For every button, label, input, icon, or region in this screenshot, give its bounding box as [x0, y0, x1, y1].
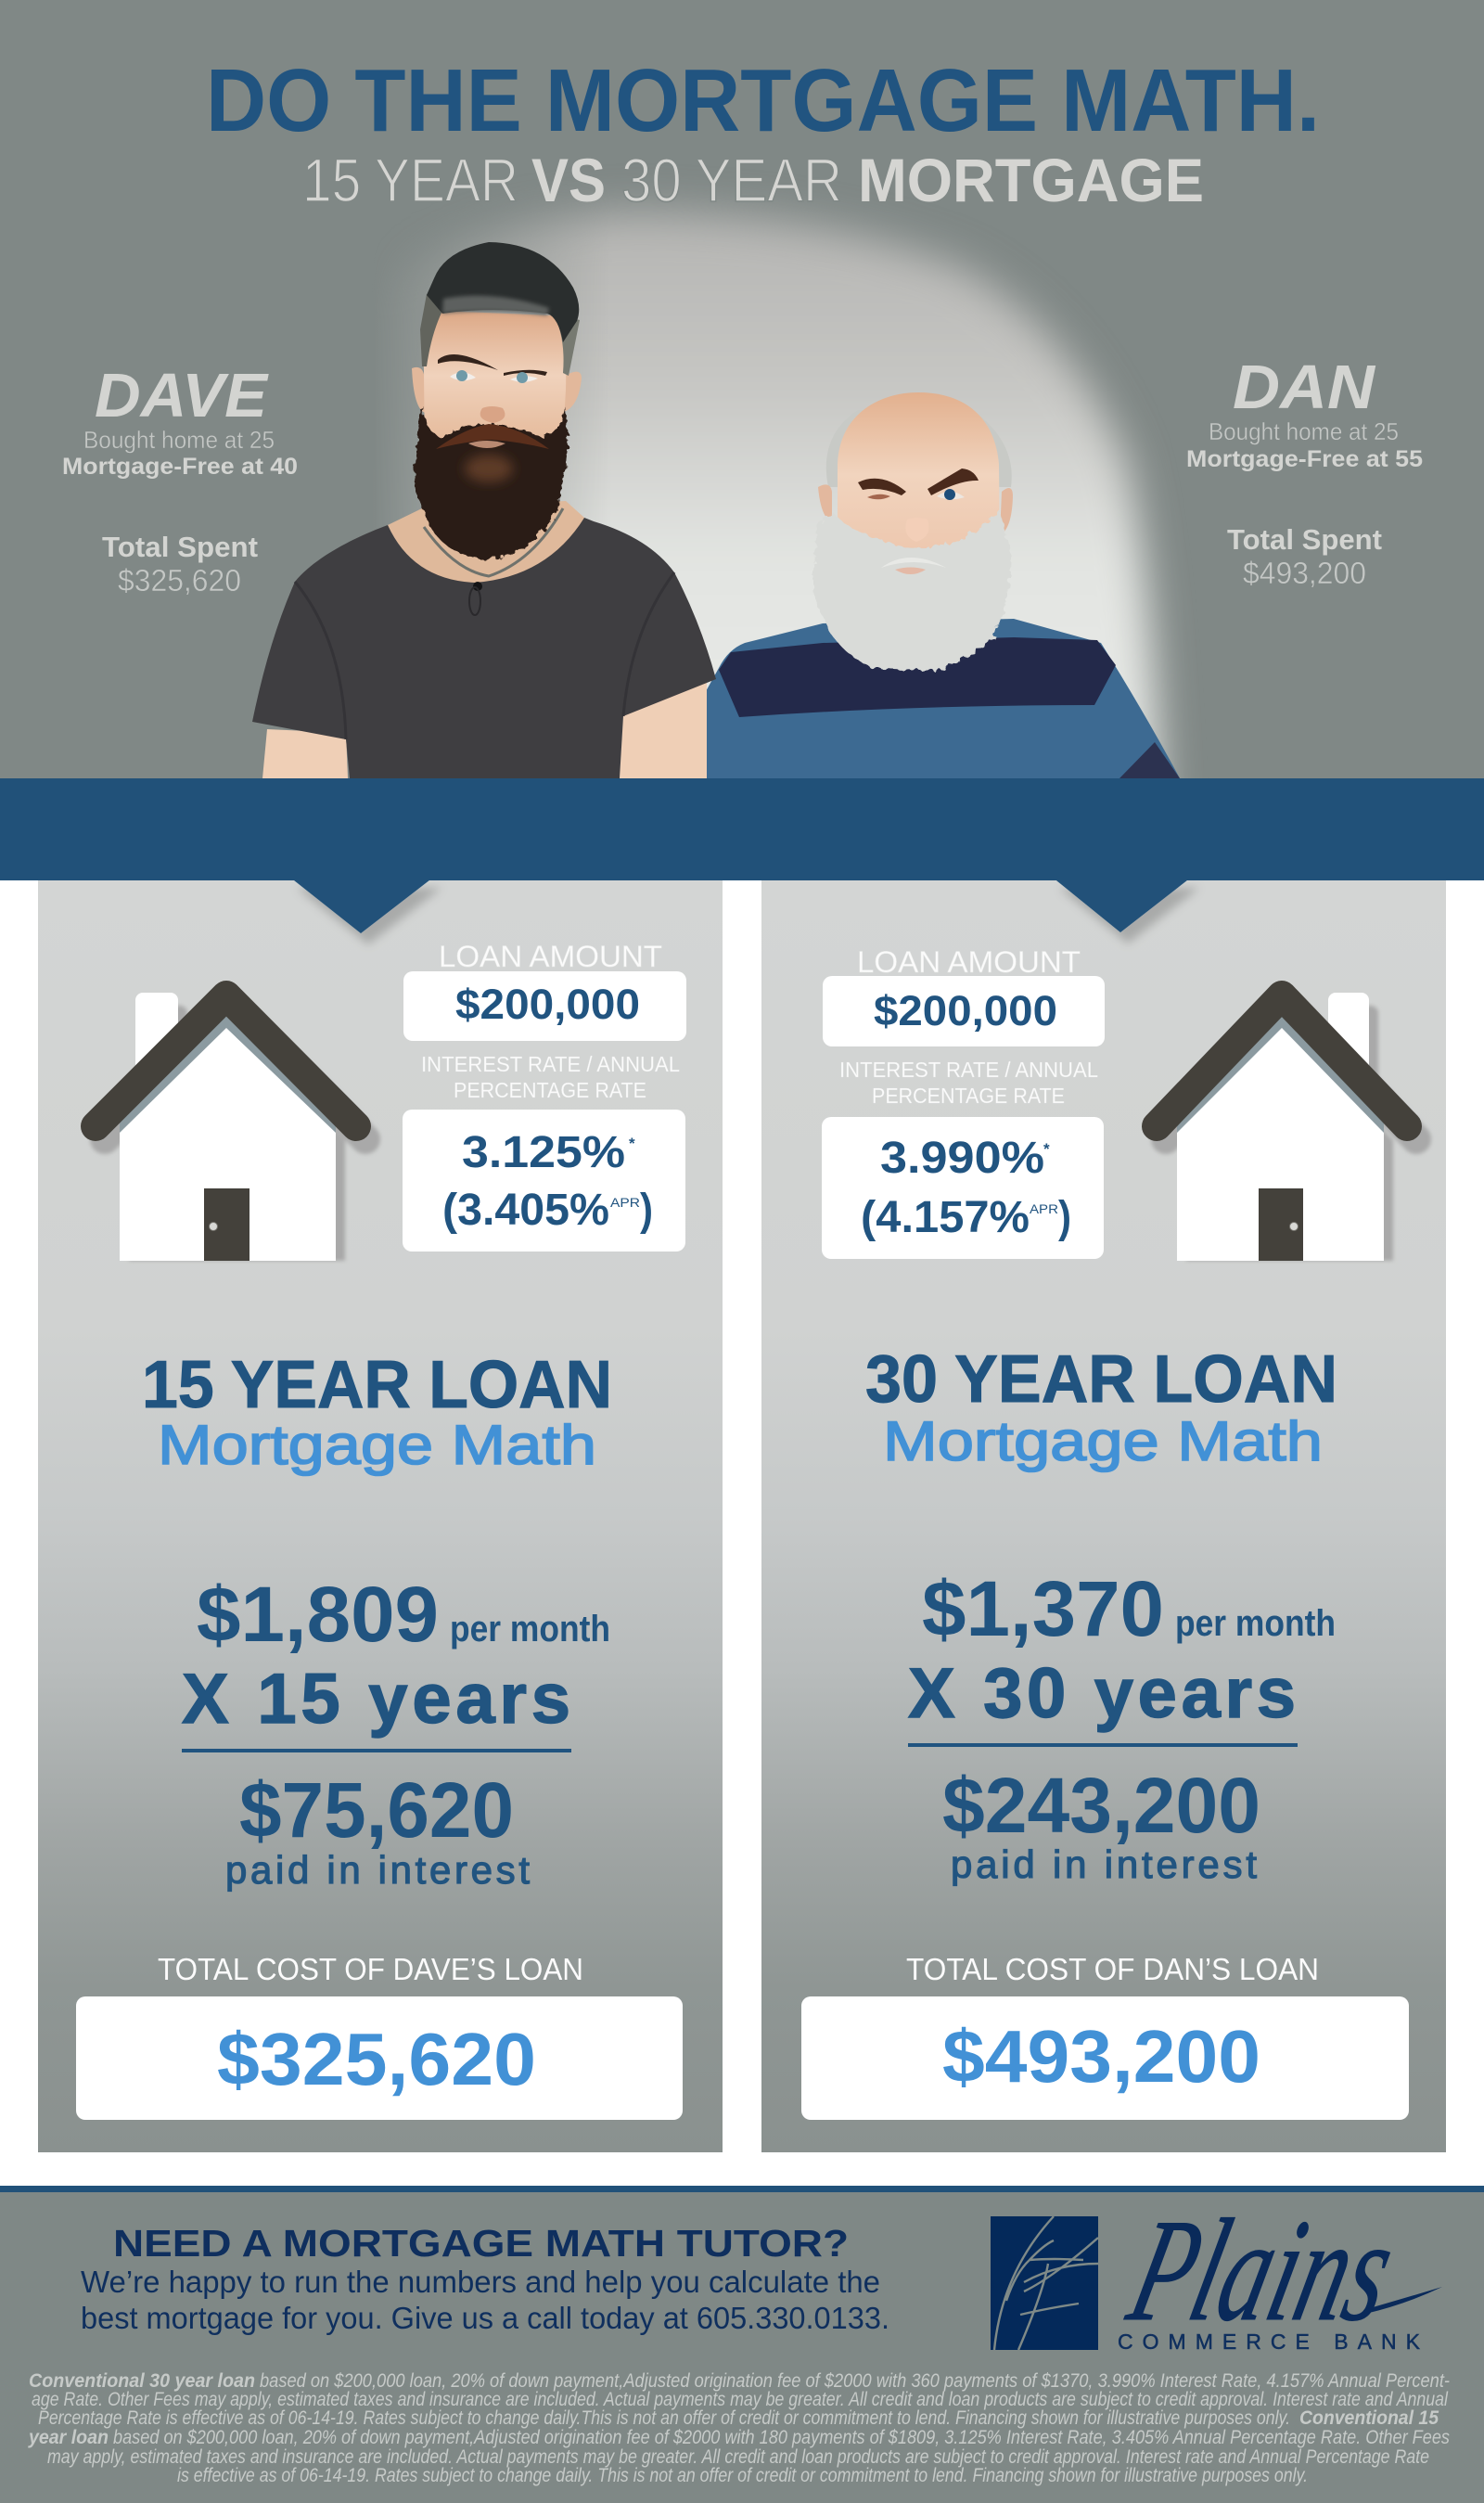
monthly payment: per month: [450, 1609, 610, 1649]
text block: Dan: DAN: [1233, 353, 1376, 422]
text block: Dave: Total Spent: [102, 531, 258, 563]
monthly payment: [922, 1565, 1336, 1652]
text block: Dave: $325,620: [118, 563, 241, 597]
text block: Dan: Bought home at 25: [1209, 417, 1399, 445]
monthly payment: [197, 1571, 610, 1658]
label: interest rate: PERCENTAGE RATE: [454, 1078, 646, 1102]
icon: grass square: [991, 2216, 1098, 2350]
label: total cost: TOTAL COST OF DAVE’S LOAN: [158, 1952, 583, 1986]
monthly payment: per month: [1175, 1603, 1336, 1644]
wordmark: Commerce Bank: COMMERCE BANK: [1118, 2330, 1421, 2354]
hero background: [0, 0, 1484, 835]
subtitle: [302, 146, 1204, 214]
box: rate values: *: [629, 1135, 635, 1152]
interest paid: [942, 1762, 1260, 1886]
box: total cost value: $325,620: [217, 2018, 536, 2100]
subtitle: MORTGAGE: [858, 146, 1204, 214]
box: rate values: 3.990%: [880, 1134, 1044, 1183]
subheading: mortgage math: Mortgage Math: [883, 1410, 1323, 1472]
term multiplier: X 30 years: [908, 1654, 1296, 1733]
subtitle: VS: [531, 146, 606, 214]
box: loan amount value: $200,000: [455, 981, 640, 1028]
disclaimer: Conventional 15: [1299, 2407, 1439, 2429]
icon: house left: [96, 993, 365, 1261]
interest paid: $243,200: [942, 1762, 1260, 1849]
text block: Dan: [1186, 353, 1423, 590]
box: rate values: (3.405%: [442, 1186, 609, 1235]
interest paid: [225, 1766, 530, 1892]
text block: Dan: Mortgage-Free at 55: [1186, 446, 1423, 472]
logo: Plains Commerce Bank: [991, 2189, 1442, 2354]
disclaimer: year loan: [28, 2427, 109, 2448]
icon: house right: [1157, 993, 1416, 1261]
box: rate values: ): [640, 1186, 653, 1235]
arrow: 15 year pointer: [289, 877, 434, 933]
term multiplier: X 15 years: [182, 1660, 570, 1739]
box: loan amount value: $200,000: [874, 987, 1057, 1034]
box: total cost value: [76, 1996, 683, 2120]
subtitle: 15 YEAR: [302, 146, 518, 214]
label: interest rate: INTEREST RATE / ANNUAL: [839, 1058, 1098, 1082]
disclaimer: [28, 2370, 1450, 2486]
footer panel: [0, 2186, 1484, 2503]
person: Dan: [700, 392, 1180, 778]
label: interest rate: PERCENTAGE RATE: [872, 1084, 1065, 1108]
box: rate values: 3.125%: [462, 1128, 625, 1177]
box: rate values: [403, 1110, 685, 1252]
subtitle: 30 YEAR: [621, 146, 842, 214]
footer body text: best mortgage for you. Give us a call today at 605.330.0133.: [81, 2301, 889, 2335]
monthly payment: $1,809: [197, 1571, 439, 1658]
blue band: [0, 778, 1484, 880]
box: rate values: APR: [1030, 1201, 1058, 1216]
box: rate values: ): [1058, 1193, 1071, 1242]
text block: Dave: DAVE: [95, 361, 269, 430]
monthly payment: $1,370: [922, 1565, 1164, 1652]
text block: Dave: [62, 361, 298, 597]
disclaimer: Conventional 30 year loan: [29, 2370, 255, 2392]
footer body text: We’re happy to run the numbers and help you calculate the: [81, 2265, 880, 2299]
text block: Dan: $493,200: [1243, 556, 1366, 590]
label: loan amount: LOAN AMOUNT: [439, 940, 662, 973]
box: total cost value: $493,200: [942, 2015, 1260, 2098]
footer heading: NEED A MORTGAGE MATH TUTOR?: [113, 2222, 849, 2265]
label: interest rate: INTEREST RATE / ANNUAL: [421, 1052, 680, 1076]
label: total cost: TOTAL COST OF DAN’S LOAN: [906, 1952, 1319, 1986]
box: rate values: *: [1043, 1140, 1050, 1158]
interest paid: paid in interest: [225, 1848, 530, 1892]
text block: Dave: Mortgage-Free at 40: [62, 454, 298, 480]
panel: 15 year loan: [38, 877, 723, 2152]
text block: Dan: Total Spent: [1227, 523, 1382, 556]
label: interest rate: [421, 1052, 680, 1102]
disclaimer: is effective as of 06-14-19. Rates subject to change daily. This is not an offer of credit or commitment to lend. Financing shown for illustrative purposes only.: [177, 2465, 1308, 2486]
label: interest rate: [839, 1058, 1098, 1108]
box: rate values: [822, 1117, 1104, 1259]
panel: 30 year loan: [761, 877, 1446, 2152]
interest paid: paid in interest: [951, 1842, 1257, 1886]
box: rate values: APR: [610, 1195, 640, 1210]
subheading: mortgage math: Mortgage Math: [158, 1414, 596, 1476]
title: DO THE MORTGAGE MATH.: [206, 51, 1320, 150]
heading: 30 year loan: 30 YEAR LOAN: [865, 1342, 1337, 1417]
text block: Dave: Bought home at 25: [83, 426, 275, 454]
footer body text: [81, 2265, 889, 2335]
box: loan amount value: [823, 976, 1105, 1046]
interest paid: $75,620: [239, 1766, 514, 1854]
label: loan amount: LOAN AMOUNT: [857, 945, 1081, 979]
disclaimer: Percentage Rate is effective as of 06-14-19. Rates subject to change daily.This is not an offer of credit or commitment to lend. Financing shown for illustrative purposes only.: [38, 2407, 1290, 2429]
box: rate values: (4.157%: [861, 1193, 1030, 1242]
box: loan amount value: [403, 971, 686, 1041]
heading: 15 year loan: 15 YEAR LOAN: [142, 1348, 612, 1422]
person: Dave: [252, 242, 716, 778]
box: total cost value: [801, 1996, 1409, 2120]
arrow: 30 year pointer: [1052, 877, 1192, 932]
